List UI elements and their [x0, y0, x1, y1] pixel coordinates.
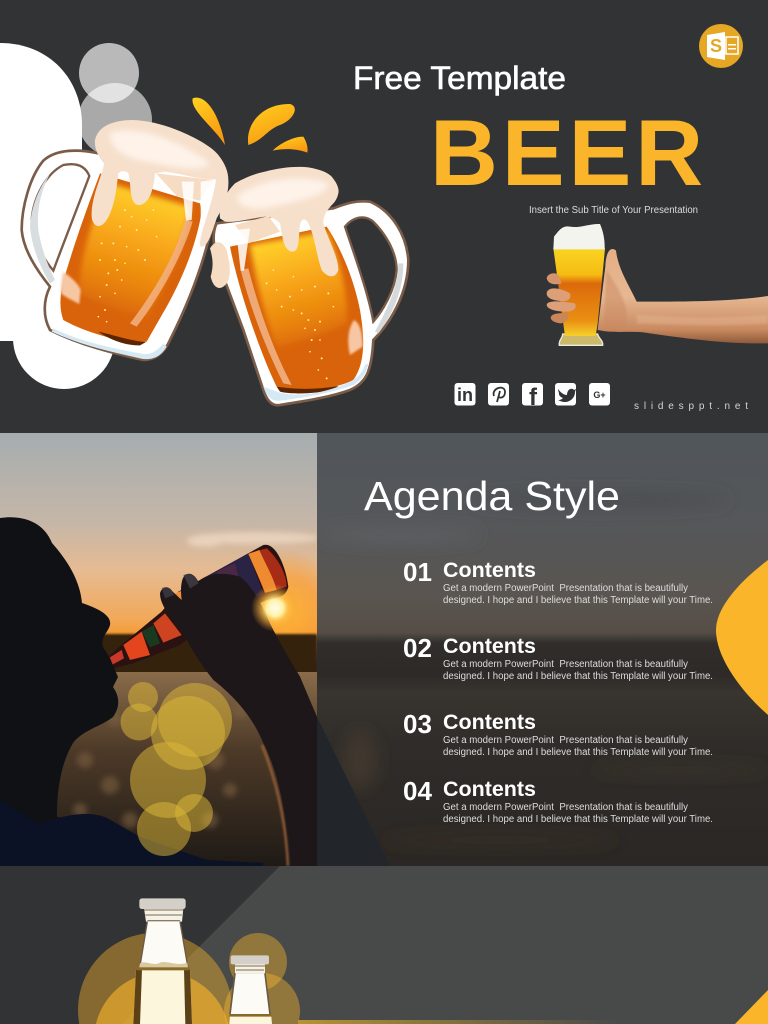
- agenda item 04: 04: [403, 776, 432, 806]
- yellow corner triangle: [735, 990, 768, 1024]
- agenda item 04: designed. I hope and I believe that this Template will your Time.: [443, 814, 713, 825]
- agenda item 03: Contents: [443, 711, 536, 734]
- decorative yellow line: [298, 1020, 618, 1024]
- panel: bottles slide: [0, 866, 768, 1024]
- social icons: [454, 383, 610, 411]
- decorative yellow circles: [78, 933, 300, 1024]
- image: small beer bottle: [229, 955, 272, 1024]
- icon: beer splashes: [192, 98, 308, 153]
- agenda item 03: designed. I hope and I believe that this Template will your Time.: [443, 747, 713, 758]
- agenda item 02: [404, 638, 712, 681]
- icon: linkedin: [454, 383, 476, 406]
- heading: Free Template: Free Template: [353, 60, 566, 96]
- heading: BEER: BEER: [430, 100, 707, 205]
- image: arm holding beer glass: [547, 224, 768, 345]
- icon: logo badge: S: [710, 36, 722, 56]
- icon: facebook: [522, 383, 543, 411]
- panel: title slide: [0, 0, 768, 433]
- sun: [252, 585, 290, 632]
- agenda item 04: Get a modern PowerPoint Presentation that is beautifully: [443, 802, 688, 813]
- decorative grey circles: [78, 43, 152, 157]
- icon: pinterest: [488, 383, 509, 406]
- decorative white blob: [0, 43, 115, 389]
- arm and hand: [160, 574, 317, 867]
- agenda item 04: Contents: [443, 778, 536, 801]
- agenda item 03: Get a modern PowerPoint Presentation that is beautifully: [443, 735, 688, 746]
- icon: logo badge: [699, 24, 743, 68]
- panel streaks: [344, 734, 376, 786]
- icon: linkedin: in: [457, 385, 473, 405]
- decorative yellow bubbles: [120, 682, 232, 856]
- forearm seen through panel: [317, 717, 390, 866]
- image: large beer bottle: [133, 898, 192, 1024]
- left mug: [22, 120, 228, 360]
- image: sunset photo with man drinking beer: [0, 433, 347, 867]
- right mug: [210, 167, 408, 405]
- agenda item 01: 01: [403, 557, 432, 587]
- agenda item 02: Get a modern PowerPoint Presentation that is beautifully: [443, 659, 688, 670]
- agenda item 01: [404, 562, 712, 605]
- agenda item 02: designed. I hope and I believe that this Template will your Time.: [443, 671, 713, 682]
- agenda item 04: [404, 782, 712, 824]
- man silhouette: [0, 517, 130, 831]
- icon: clinking beer mugs: [22, 98, 408, 405]
- panel: agenda slide: [0, 433, 768, 867]
- icon: google plus: [589, 383, 610, 406]
- icon: facebook: f: [529, 384, 538, 411]
- agenda item 02: Contents: [443, 635, 536, 658]
- lighter diagonal panel: [122, 866, 768, 1024]
- decorative yellow side shape: [716, 560, 768, 715]
- forearm rim glow: [262, 745, 288, 866]
- icon: google plus: G+: [593, 390, 606, 400]
- beer bottle: [108, 545, 288, 668]
- subtitle: Insert the Sub Title of Your Presentation: [529, 205, 698, 216]
- agenda item 02: 02: [403, 633, 432, 663]
- agenda item 01: Get a modern PowerPoint Presentation that is beautifully: [443, 583, 688, 594]
- agenda item 01: designed. I hope and I believe that this Template will your Time.: [443, 595, 713, 606]
- heading: Agenda Style: Agenda Style: [364, 473, 620, 519]
- agenda item 01: Contents: [443, 559, 536, 582]
- agenda item 03: [404, 714, 712, 757]
- website label: slidesppt.net: [634, 401, 748, 412]
- agenda item 03: 03: [403, 709, 432, 739]
- icon: twitter: [555, 383, 576, 406]
